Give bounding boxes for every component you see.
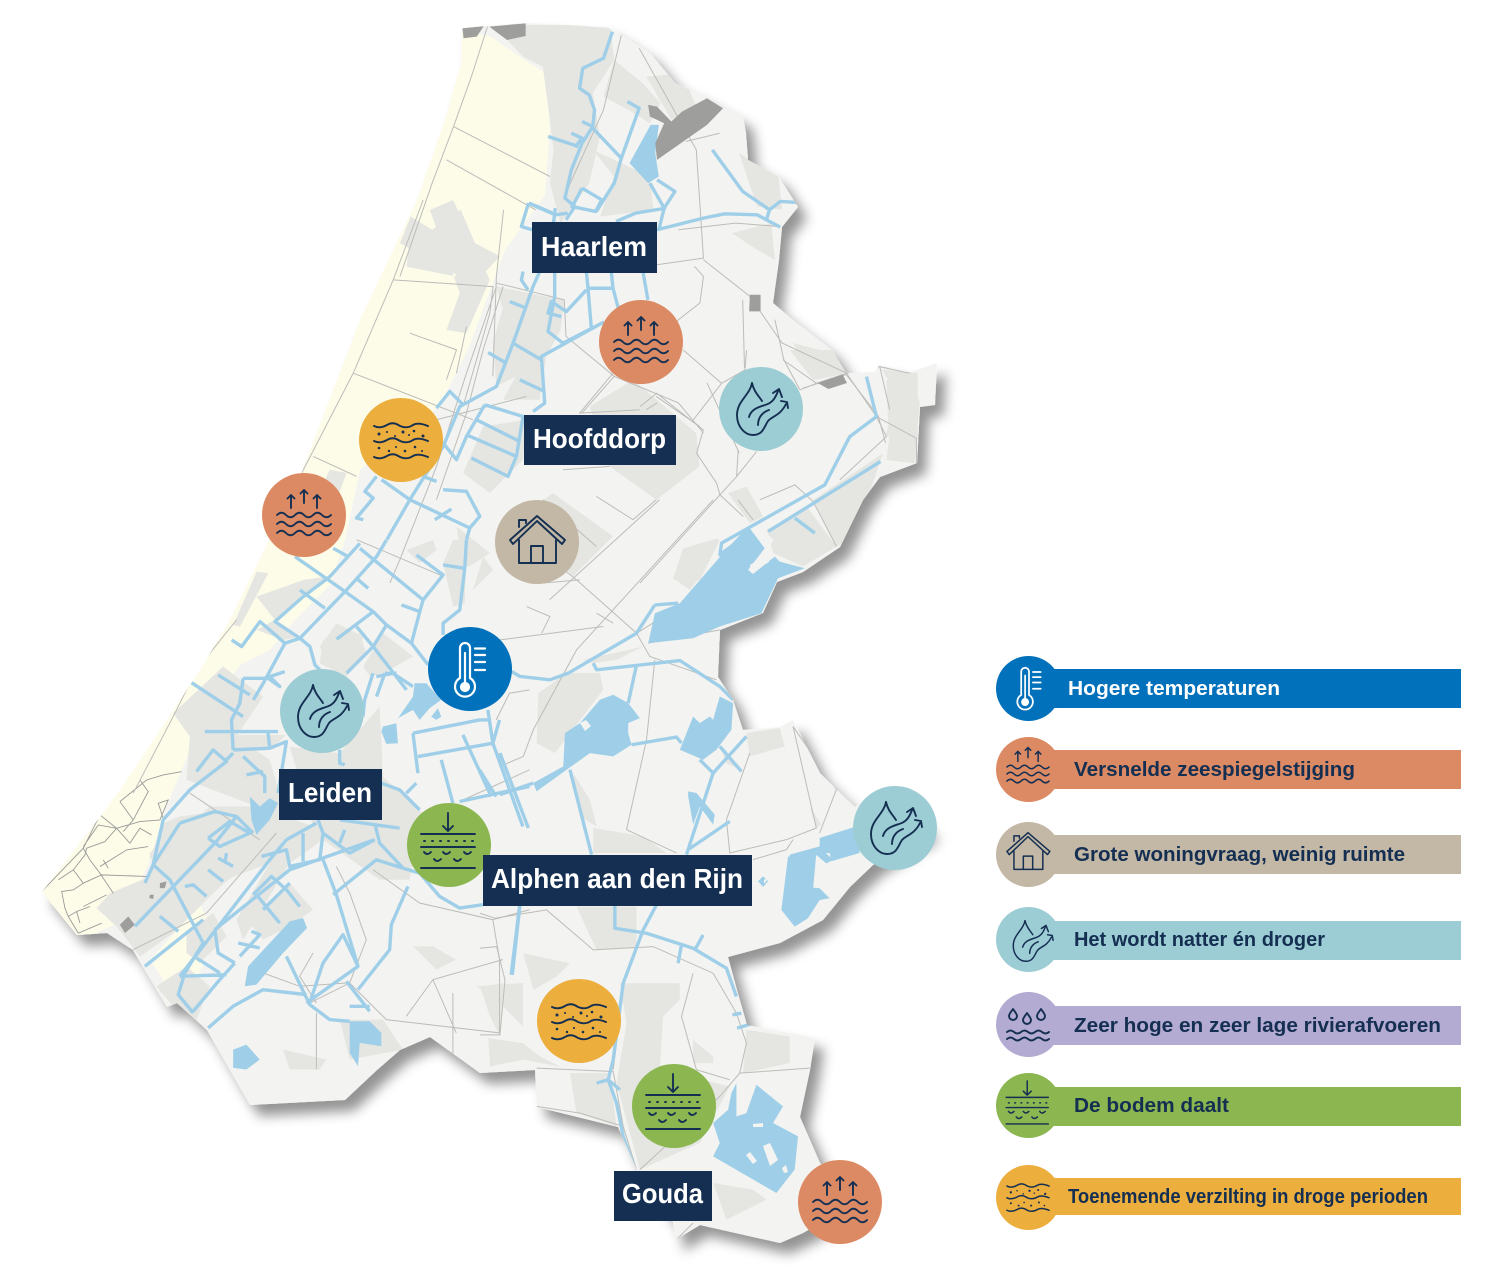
legend item: river discharge extremes: Zeer hoge en zeer lage rivierafvoeren <box>1074 1015 1441 1037</box>
marker: subsidence, Gouda <box>632 1064 716 1148</box>
marker: housing demand <box>495 500 579 584</box>
city label: Alphen aan den Rijn: Alphen aan den Rijn <box>491 863 743 894</box>
city label: Leiden: Leiden <box>288 777 372 808</box>
water courses <box>135 32 880 1170</box>
legend <box>996 656 1461 1230</box>
fine parcel mesh in the south-western dunes <box>42 772 182 933</box>
legend item: accelerated sea level rise <box>996 737 1461 802</box>
city label: Leiden <box>279 769 382 820</box>
marker: sea level rise, Gouda <box>798 1160 882 1244</box>
marker: sea level rise, coast <box>262 473 346 557</box>
marker: sea level rise, Haarlem <box>599 300 683 384</box>
legend item: subsidence <box>996 1073 1461 1138</box>
legend item: wetter and drier: Het wordt natter én droger <box>1074 929 1325 951</box>
legend item: subsidence: De bodem daalt <box>1074 1095 1229 1117</box>
map base with drop shadow <box>42 23 937 1243</box>
legend item: salinisation <box>996 1165 1461 1230</box>
legend item: wetter and drier <box>996 907 1461 972</box>
islands in the lakes <box>580 528 788 1173</box>
legend item: housing demand <box>996 822 1461 887</box>
marker: higher temperatures <box>428 627 512 711</box>
legend item: river discharge extremes <box>996 992 1461 1057</box>
city label: Gouda: Gouda <box>622 1178 703 1209</box>
marker: wetter and drier, east <box>719 367 803 451</box>
map layers <box>40 23 920 1240</box>
city label: Hoofddorp: Hoofddorp <box>533 423 666 454</box>
water bodies <box>233 125 860 1193</box>
city label: Gouda <box>614 1171 712 1221</box>
marker: wetter and drier, far east <box>853 786 937 870</box>
legend item: higher temperatures: Hogere temperaturen <box>1068 678 1280 700</box>
dunes, southern patches <box>152 906 207 1001</box>
city label: Hoofddorp <box>524 415 676 465</box>
city label: Haarlem: Haarlem <box>541 231 647 262</box>
marker: subsidence, Alphen <box>407 803 491 887</box>
legend item: higher temperatures <box>996 656 1461 721</box>
map of the region <box>40 23 937 1243</box>
legend item: housing demand: Grote woningvraag, weinig ruimte <box>1074 844 1405 866</box>
roads and boundaries <box>133 27 916 1240</box>
marker: salinisation, coast <box>359 398 443 482</box>
marker: wetter and drier, Leiden <box>280 669 364 753</box>
dunes <box>40 30 550 940</box>
marker: salinisation, south <box>537 979 621 1063</box>
city label: Haarlem <box>532 222 657 273</box>
legend item: accelerated sea level rise: Versnelde zeespiegelstijging <box>1074 759 1355 781</box>
dark patches <box>120 23 847 933</box>
urban areas <box>97 25 920 1220</box>
city label: Alphen aan den Rijn <box>483 855 752 906</box>
legend item: salinisation: Toenemende verzilting in droge perioden <box>1068 1186 1428 1208</box>
